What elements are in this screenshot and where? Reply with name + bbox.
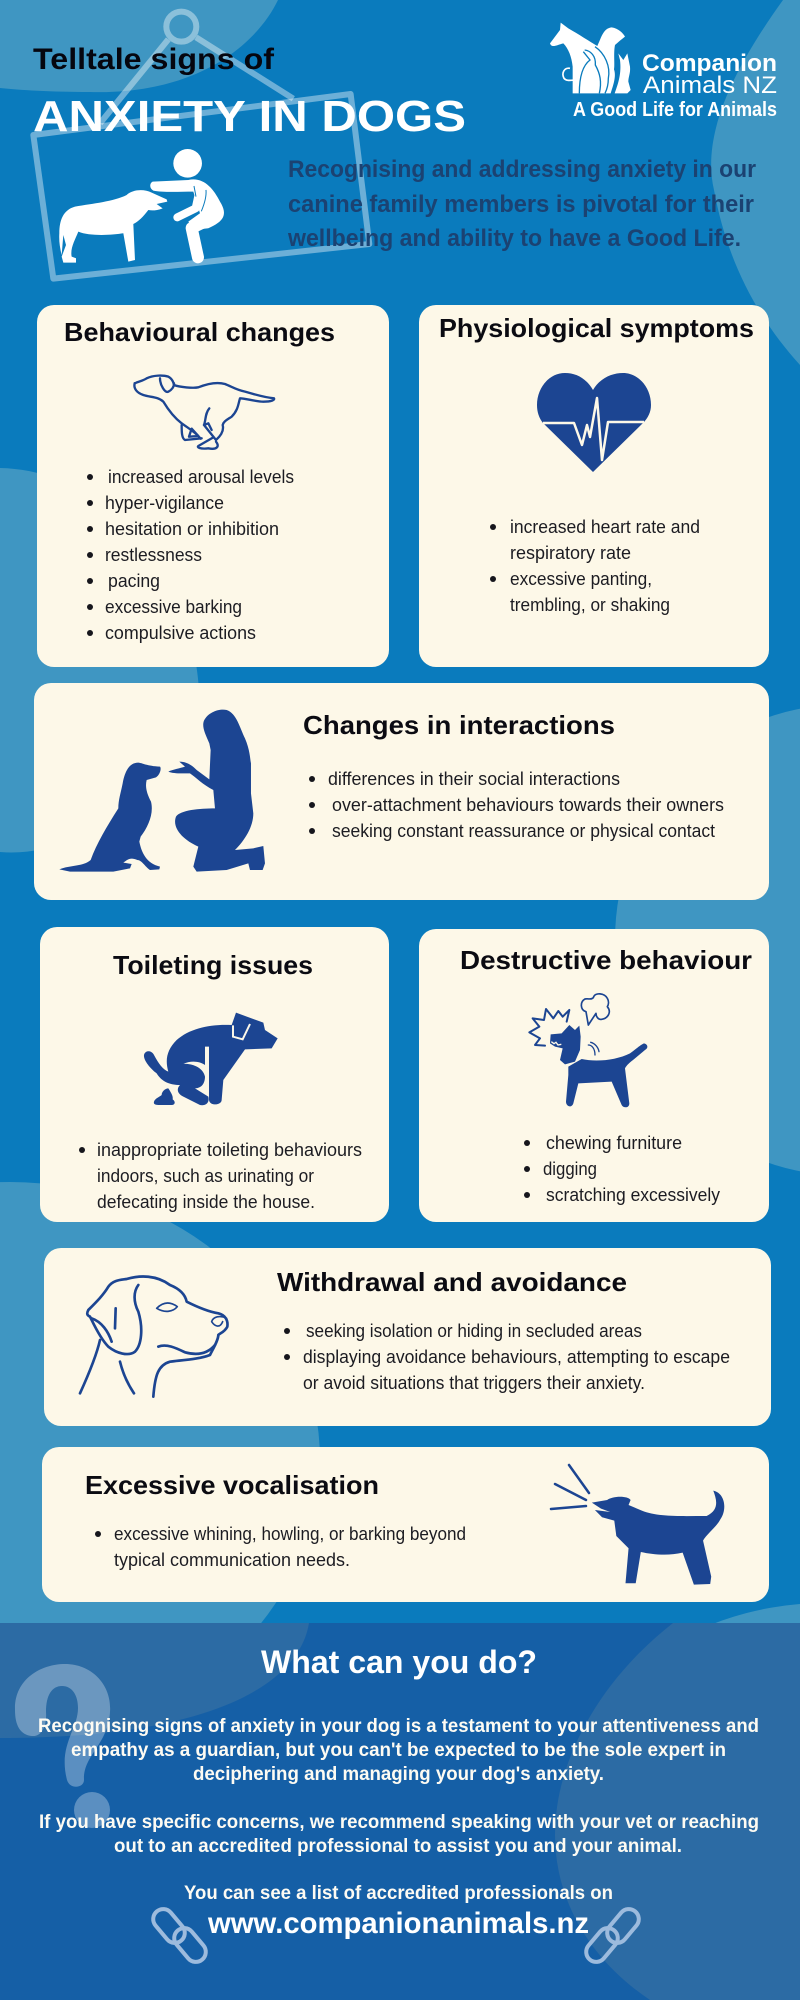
bullet list <box>87 467 294 643</box>
intro paragraph <box>287 156 756 252</box>
logo <box>550 23 777 121</box>
heading: Toileting issues <box>113 950 313 980</box>
icon: right chain link <box>582 1905 643 1966</box>
bullet list <box>309 769 724 841</box>
footer paragraph 2: If you have specific concerns, we recommend speaking with your vet or reaching <box>39 1812 759 1833</box>
footer paragraph 2 <box>39 1812 759 1857</box>
bullet list <box>95 1524 466 1570</box>
bullet list: increased arousal levels <box>108 467 294 487</box>
footer paragraph 1: empathy as a guardian, but you can't be expected to be the sole expert in <box>71 1740 726 1761</box>
icon: barking dog <box>551 1465 724 1585</box>
bullet list: excessive panting, <box>510 569 652 589</box>
icon: dog and kneeling woman <box>59 710 265 872</box>
heading: Withdrawal and avoidance <box>277 1267 627 1297</box>
footer heading: What can you do? <box>261 1644 537 1680</box>
footer background <box>0 1623 800 2000</box>
panel: withdrawal and avoidance <box>44 1248 771 1426</box>
footer paragraph 1: Recognising signs of anxiety in your dog is a testament to your attentiveness and <box>38 1716 759 1737</box>
heading: Destructive behaviour <box>460 945 752 975</box>
panel: changes in interactions <box>34 683 769 900</box>
hanging frame decoration <box>33 12 369 279</box>
intro paragraph: canine family members is pivotal for their <box>288 191 754 218</box>
bullet list: compulsive actions <box>105 623 256 643</box>
panel: physiological symptoms <box>419 305 769 667</box>
footer paragraph 1 <box>38 1716 759 1785</box>
icon: running dog <box>134 376 274 449</box>
icon: angry dog <box>529 994 647 1107</box>
bullet list <box>524 1133 720 1205</box>
bullet list: defecating inside the house. <box>97 1192 315 1212</box>
footer paragraph 2: out to an accredited professional to assist you and your animal. <box>114 1836 682 1857</box>
logo animals icon <box>550 23 631 93</box>
heading: Physiological symptoms <box>439 313 754 343</box>
logo: Animals NZ <box>643 72 777 99</box>
bullet list: hyper-vigilance <box>105 493 224 513</box>
bullet list <box>490 517 700 615</box>
bullet list: seeking isolation or hiding in secluded areas <box>306 1321 642 1341</box>
heading: Behavioural changes <box>64 317 335 347</box>
bullet list: excessive barking <box>105 597 242 617</box>
bullet list: restlessness <box>105 545 202 565</box>
bullet list: seeking constant reassurance or physical contact <box>332 821 715 841</box>
title line 2: ANXIETY IN DOGS <box>33 92 466 141</box>
intro paragraph: Recognising and addressing anxiety in our <box>288 156 756 183</box>
bullet list: increased heart rate and <box>510 517 700 537</box>
panel: destructive behaviour <box>419 929 769 1222</box>
bullet list: hesitation or inhibition <box>105 519 279 539</box>
bullet list: over-attachment behaviours towards their owners <box>332 795 724 815</box>
icon: heart with pulse <box>537 373 651 472</box>
icon: question mark <box>15 1664 110 1828</box>
website link: www.companionanimals.nz <box>207 1907 589 1940</box>
bullet list: respiratory rate <box>510 543 631 563</box>
heading: Excessive vocalisation <box>85 1470 379 1500</box>
bullet list: trembling, or shaking <box>510 595 670 615</box>
bullet list: inappropriate toileting behaviours <box>97 1140 362 1160</box>
icon: dog head outline <box>80 1276 227 1397</box>
heading: Changes in interactions <box>303 710 615 740</box>
icon: squatting dog <box>144 1013 278 1105</box>
bullet list: pacing <box>108 571 160 591</box>
bullet list: indoors, such as urinating or <box>97 1166 314 1186</box>
bullet list: digging <box>543 1159 597 1179</box>
bullet list: displaying avoidance behaviours, attempting to escape <box>303 1347 730 1367</box>
icon: dog and person <box>59 149 224 263</box>
bullet list: differences in their social interactions <box>328 769 620 789</box>
intro paragraph: wellbeing and ability to have a Good Life. <box>287 225 741 252</box>
bullet list: excessive whining, howling, or barking beyond <box>114 1524 466 1544</box>
bullet list <box>284 1321 730 1393</box>
footer paragraph 1: deciphering and managing your dog's anxiety. <box>193 1764 604 1785</box>
icon: left chain link <box>149 1905 210 1966</box>
bullet list: chewing furniture <box>546 1133 682 1153</box>
logo wordmark: Companion <box>642 50 777 77</box>
logo: A Good Life for Animals <box>573 99 777 121</box>
bullet list <box>79 1140 362 1212</box>
panel: toileting issues <box>40 927 389 1222</box>
bullet list: typical communication needs. <box>114 1550 350 1570</box>
title line 1: Telltale signs of <box>33 43 275 76</box>
bullet list: scratching excessively <box>546 1185 720 1205</box>
footer link intro: You can see a list of accredited professionals on <box>184 1883 613 1904</box>
bullet list: or avoid situations that triggers their anxiety. <box>303 1373 645 1393</box>
panel: behavioural changes <box>37 305 389 667</box>
panel: excessive vocalisation <box>42 1447 769 1602</box>
